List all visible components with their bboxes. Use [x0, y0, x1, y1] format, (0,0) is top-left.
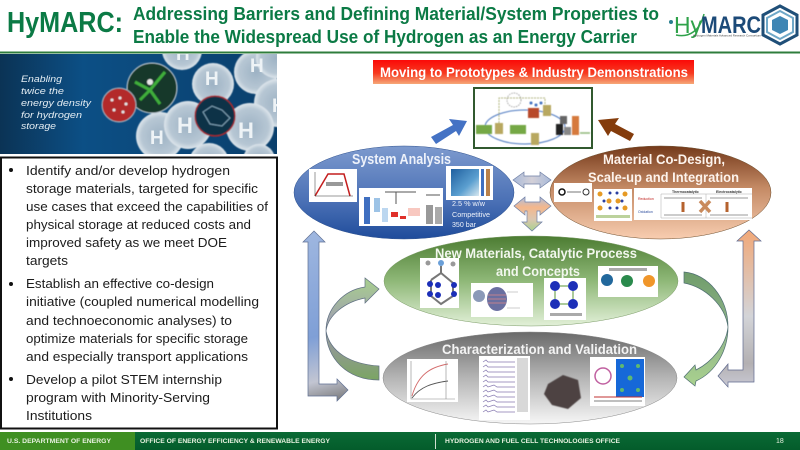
logo: HyMARC: Hy [674, 12, 702, 38]
chart: isotherm curves [407, 359, 458, 402]
banner caption: Enabling [21, 74, 63, 85]
heading: material co-design: Scale-up and Integration [588, 169, 739, 185]
banner image: hydrogen storage: H [150, 128, 164, 149]
diagram: thermo and electrochemical table [634, 188, 752, 220]
label: 2.5 % w/w competitive 350 bar: Competitive [452, 212, 490, 219]
chart: diffraction patterns [479, 356, 530, 420]
label: 2.5 % w/w competitive 350 bar: 350 bar [452, 222, 477, 229]
heading: moving to prototypes [373, 60, 694, 84]
chart: refinement pattern and map [590, 357, 645, 406]
header rule [0, 52, 800, 54]
heading: characterization: Characterization and Validation [442, 341, 637, 357]
arrow: system analysis to prototypes [431, 119, 467, 144]
bullet 2: optimize materials for specific storage [26, 331, 248, 346]
logo: HyMARC: Hydrogen Materials Advanced Research Consortium [693, 34, 761, 38]
panel: characterization and validation [383, 332, 677, 424]
heading: system analysis: System Analysis [352, 152, 451, 168]
heading: material co-design: Material Co-Design, [603, 151, 725, 167]
logo: HyMARC: MARC [701, 12, 761, 39]
bullet 2 [9, 276, 259, 364]
bullet 2: Establish an effective co-design [26, 276, 214, 291]
banner image: hydrogen storage [0, 30, 302, 183]
label: 2.5 % w/w competitive 350 bar [452, 201, 490, 229]
diagram: nanoparticle [471, 283, 533, 317]
header [7, 3, 659, 47]
arrow: left vertical bidirectional [303, 231, 348, 401]
chart: heat map [446, 166, 493, 200]
arrow: material co-design to prototypes [598, 118, 634, 141]
arrow: double arrow between analysis and material [513, 172, 551, 188]
bullet 3: Institutions [26, 408, 92, 423]
heading: moving to prototypes: Moving to Prototypes & Industry Demonstrations [380, 65, 688, 80]
banner image: hydrogen storage: H [205, 69, 219, 90]
banner image: hydrogen storage: H [272, 96, 286, 117]
diagram: thermo and electrochemical table: Electrocatalytic [716, 190, 742, 194]
arrow: left curved [326, 278, 379, 380]
panel: new materials [384, 236, 678, 326]
bullet 1: Identify and/or develop hydrogen [26, 163, 230, 178]
panel: goals bullet list [1, 158, 277, 428]
banner caption: storage [21, 121, 56, 132]
bullet 2: and especially transport applications [26, 349, 248, 364]
title: subtitle: Enable the Widespread Use of Hydrogen as an Energy Carrier [133, 26, 637, 47]
bullet 3: Develop a pilot STEM internship [26, 372, 222, 387]
panel: system analysis [294, 146, 514, 239]
banner image: hydrogen storage: H [238, 118, 254, 143]
footer: office: OFFICE OF ENERGY EFFICIENCY & RENEWABLE ENERGY [140, 438, 331, 445]
heading: new materials: and Concepts [496, 263, 580, 279]
bullet 3: program with Minority-Serving [26, 390, 210, 405]
banner caption: energy density [21, 98, 92, 109]
panel: material co-design [550, 146, 771, 239]
diagram: thermo and electrochemical table: Thermocatalytic [672, 190, 699, 194]
label: 2.5 % w/w competitive 350 bar: 2.5 % w/w [452, 201, 486, 208]
banner caption [21, 74, 92, 132]
diagram: molecular structure [420, 258, 459, 308]
title: subtitle: Addressing Barriers and Defining Material/System Properties to [133, 3, 659, 24]
bullet 1: use cases that exceed the capabilities of [26, 199, 268, 214]
banner image: hydrogen storage: H [177, 113, 193, 138]
diagram: molecules [554, 183, 592, 202]
panel: prototype system diagram [474, 88, 592, 148]
footer: department: U.S. DEPARTMENT OF ENERGY [7, 438, 112, 445]
banner image: hydrogen storage: H [250, 56, 264, 77]
diagram: framework [544, 278, 586, 320]
bullet 1 [9, 163, 268, 268]
bullet 1: targets [26, 253, 68, 268]
banner caption: for hydrogen [21, 110, 82, 121]
footer: page number: 18 [776, 438, 784, 445]
arrow: right vertical bidirectional [718, 230, 761, 387]
banner image: hydrogen storage: H [176, 44, 190, 65]
footer: hydrogen office: HYDROGEN AND FUEL CELL TECHNOLOGIES OFFICE [445, 438, 621, 445]
title: subtitle [133, 3, 659, 47]
bullet 1: storage materials, targeted for specific [26, 181, 258, 196]
arrow: three-way arrow [514, 197, 551, 231]
diagram: crystal lattice [594, 189, 632, 221]
heading: new materials [435, 245, 637, 279]
logo: HyMARC [669, 6, 797, 44]
banner caption: twice the [21, 86, 64, 97]
bullet 1: physical storage at reduced costs and [26, 217, 251, 232]
heading: material co-design [588, 151, 739, 185]
diagram: spheres [598, 266, 658, 297]
bullet 2: initiative (coupled numerical modelling [26, 294, 259, 309]
diagram: thermo and electrochemical table: Oxidation [638, 210, 653, 214]
chart: cost bars and schematic [359, 188, 443, 226]
bullet 3 [9, 372, 222, 423]
heading: new materials: New Materials, Catalytic Process [435, 245, 637, 261]
arrow: right curved [684, 272, 728, 386]
chart: pressure cycle [309, 169, 357, 202]
diagram: thermo and electrochemical table: Reduction [638, 197, 654, 201]
bullet 2: and technoeconomic analyses) to [26, 313, 232, 328]
bullet 1: improved safety as we meet DOE [26, 235, 227, 250]
footer [0, 432, 800, 450]
title: HyMARC: HyMARC: [7, 7, 123, 39]
image: crystal sample [544, 375, 581, 409]
